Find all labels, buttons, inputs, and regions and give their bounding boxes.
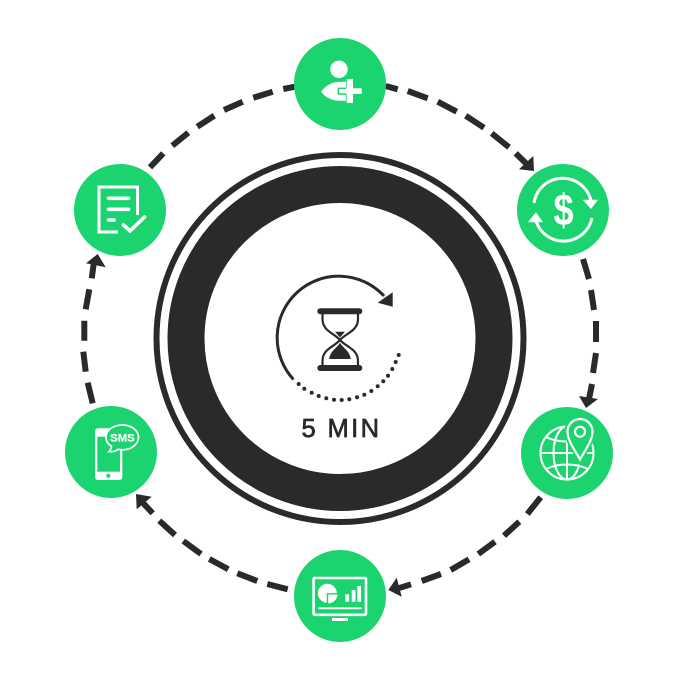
arrow: step 5 to step 6: [83, 254, 106, 403]
step 5: SMS notification: [65, 406, 157, 498]
circular arrow: [277, 276, 384, 380]
icon: document with check mark: [99, 187, 144, 232]
icon: user plus: [321, 61, 362, 103]
icon: phone with SMS bubble: SMS: [110, 433, 135, 445]
step 2: money exchange: [517, 164, 609, 256]
arrow: step 2 to step 3: [579, 259, 598, 408]
step 1: add user: [294, 38, 386, 130]
arrow: step 4 to step 5: [136, 494, 288, 589]
center label: 5 MIN: [302, 415, 379, 443]
dotted progress arc: [297, 353, 401, 402]
icon: dollar with cycle arrows: $: [553, 184, 574, 235]
step 6: checklist: [74, 164, 166, 256]
arrow: step 6 to step 1: [150, 87, 295, 167]
icon: monitor with charts: [314, 578, 366, 621]
step 4: analytics dashboard: [294, 550, 386, 642]
arrow: step 3 to step 4: [388, 497, 541, 597]
arrow: step 1 to step 2: [386, 86, 534, 171]
center icon: hourglass with circular arrow: [277, 276, 401, 402]
central double ring: [156, 155, 524, 522]
icon: globe with pin: [540, 419, 594, 480]
hourglass: [317, 308, 362, 371]
step 3: global location: [521, 407, 613, 499]
